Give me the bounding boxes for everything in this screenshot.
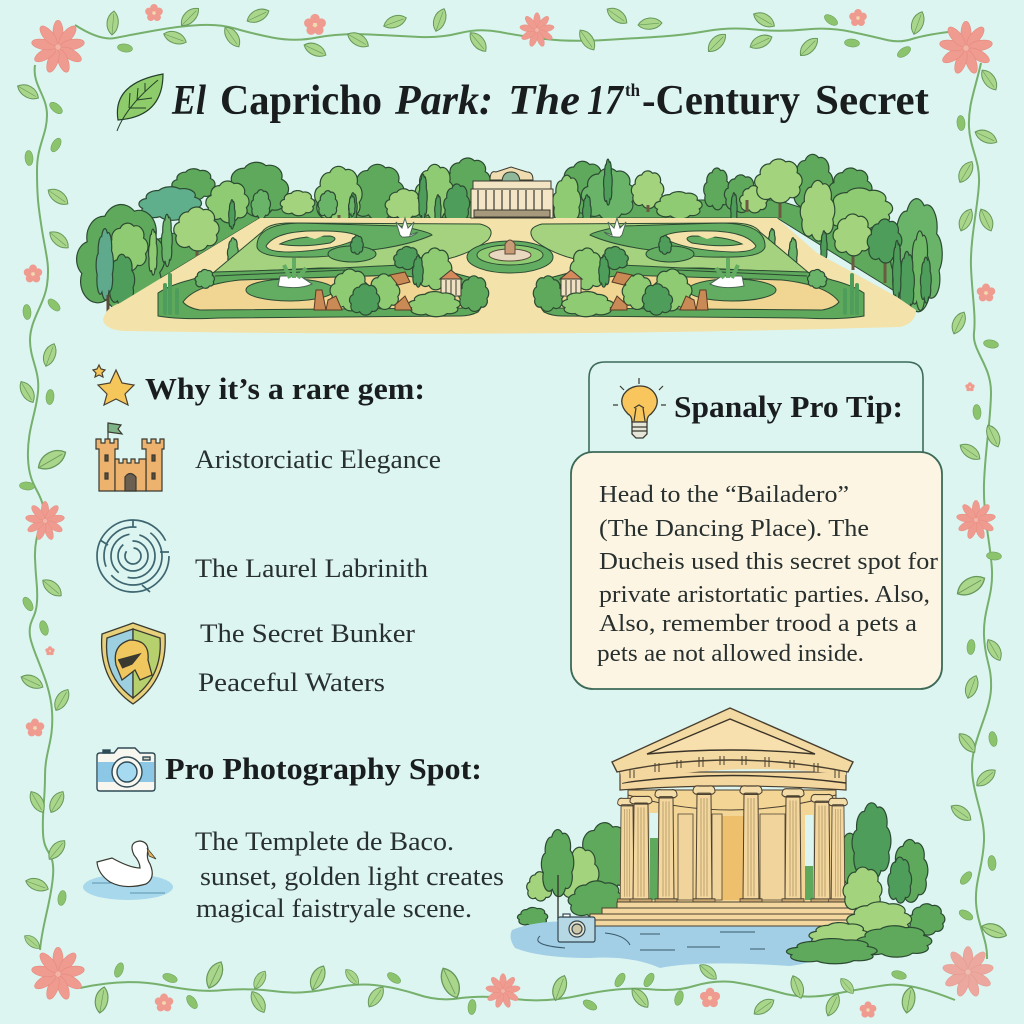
illustration: formal garden panorama bbox=[77, 154, 942, 334]
icon: labyrinth bbox=[97, 520, 169, 592]
green ground behind trees bbox=[110, 200, 917, 305]
title: Capricho bbox=[220, 78, 382, 124]
temple interior bbox=[628, 790, 836, 902]
tip card bbox=[571, 452, 942, 689]
title: -Century bbox=[642, 78, 800, 124]
icon: shield bbox=[102, 623, 165, 704]
tip text: Ducheis used this secret spot for bbox=[599, 548, 938, 575]
right trees bbox=[786, 803, 945, 964]
tip text bbox=[597, 481, 938, 667]
water bbox=[511, 921, 832, 968]
top leaves bbox=[106, 11, 119, 35]
text: aristocratic elegance: Aristorciatic Elegance bbox=[195, 445, 441, 474]
title: 17 bbox=[587, 78, 625, 124]
text: photography description bbox=[195, 827, 504, 923]
left trees bbox=[517, 823, 632, 926]
icon: light bulb bbox=[613, 378, 666, 438]
roof and entablature bbox=[620, 772, 846, 790]
heading: pro photography spot: Pro Photography Spot: bbox=[165, 751, 482, 786]
icon: swan bbox=[83, 841, 173, 900]
panel: pro tip bbox=[571, 362, 942, 689]
heading: why it's a rare gem bbox=[93, 365, 425, 406]
sand ground bbox=[103, 218, 916, 334]
tip text: pets ae not allowed inside. bbox=[597, 640, 864, 667]
temple right tree behind bbox=[833, 833, 866, 886]
icon: stars bbox=[93, 365, 134, 405]
right leaves bbox=[978, 67, 1001, 93]
steps bbox=[590, 902, 870, 926]
icon: camera in water bbox=[558, 914, 595, 942]
columns bbox=[618, 786, 847, 902]
background trees bbox=[77, 154, 942, 313]
title: Park: bbox=[394, 78, 493, 124]
building: palace bbox=[471, 167, 553, 218]
text: photography description: magical faistryale scene. bbox=[196, 894, 472, 923]
tab bbox=[589, 362, 923, 452]
text: peaceful waters: Peaceful Waters bbox=[198, 668, 385, 697]
illustration: temple of Bacchus bbox=[511, 708, 945, 968]
icon: title leaf bbox=[117, 74, 163, 131]
title: The bbox=[508, 78, 580, 124]
tip text: private aristortatic parties. Also, bbox=[599, 581, 930, 608]
bottom leaves bbox=[113, 962, 125, 978]
title: Secret bbox=[815, 78, 929, 124]
text: photography description: sunset, golden light creates bbox=[200, 862, 504, 891]
fountain bbox=[467, 240, 553, 273]
left leaves bbox=[15, 81, 41, 103]
title bbox=[171, 78, 929, 124]
text: photography description: The Templete de Baco. bbox=[195, 827, 454, 856]
tip text: Head to the “Bailadero” bbox=[599, 481, 849, 508]
heading text: Why it’s a rare gem: bbox=[145, 371, 425, 406]
flowers bbox=[31, 20, 85, 74]
tip text: (The Dancing Place). The bbox=[599, 515, 869, 542]
title: El bbox=[171, 78, 206, 124]
tip text: Also, remember trood a pets a bbox=[599, 610, 917, 637]
title: th bbox=[625, 80, 640, 100]
left parterre bbox=[158, 218, 491, 319]
icon: camera bbox=[97, 748, 155, 791]
cypress on sand bbox=[227, 195, 797, 269]
text: laurel labyrinth: The Laurel Labrinith bbox=[195, 554, 428, 583]
tab heading: Spanaly Pro Tip: bbox=[674, 389, 903, 424]
icon: castle bbox=[96, 423, 164, 491]
text: secret bunker: The Secret Bunker bbox=[200, 619, 415, 648]
